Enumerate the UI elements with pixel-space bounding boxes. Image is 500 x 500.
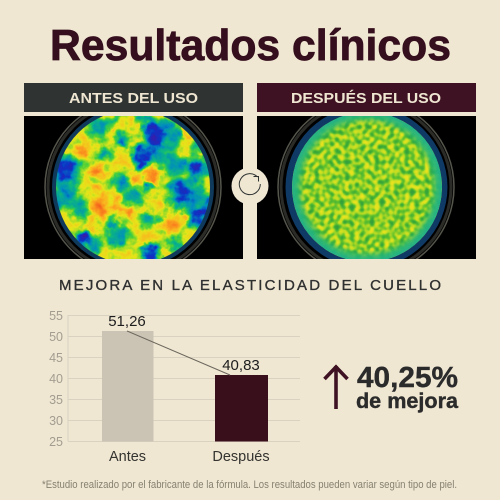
connector line	[127, 331, 230, 375]
heatmap disc	[292, 116, 442, 259]
callout: improvement	[356, 362, 458, 413]
value labels	[108, 313, 260, 374]
callout: improvement: de mejora	[356, 390, 458, 413]
category labels: Antes	[109, 449, 146, 465]
icon: refresh button	[232, 168, 268, 204]
title: Resultados clínicos	[50, 21, 451, 70]
bar chart	[49, 309, 300, 465]
panel: antes header	[24, 83, 243, 112]
value labels: 51,26	[108, 313, 146, 330]
heatmap disc	[56, 116, 210, 259]
y axis labels: 25	[49, 435, 63, 449]
y axis labels: 30	[49, 414, 63, 428]
panel: después header	[257, 83, 476, 112]
bar: antes	[102, 331, 154, 442]
y axis labels	[49, 309, 63, 449]
panel: después heatmap	[257, 116, 476, 259]
panel: después header: DESPUÉS DEL USO	[291, 90, 441, 107]
value labels: 40,83	[222, 357, 260, 374]
category labels: Después	[212, 449, 270, 465]
panel: antes header: ANTES DEL USO	[69, 90, 198, 107]
y axis labels: 55	[49, 309, 63, 323]
bar: después	[215, 375, 268, 442]
callout: improvement: 40,25%	[357, 362, 458, 394]
y axis labels: 45	[49, 351, 63, 365]
y axis labels: 35	[49, 393, 63, 407]
icon: up arrow	[324, 366, 348, 409]
y axis labels: 50	[49, 330, 63, 344]
y axis labels: 40	[49, 372, 63, 386]
panel: antes heatmap	[24, 116, 243, 259]
category labels	[109, 449, 270, 465]
section heading: MEJORA EN LA ELASTICIDAD DEL CUELLO	[59, 277, 441, 294]
